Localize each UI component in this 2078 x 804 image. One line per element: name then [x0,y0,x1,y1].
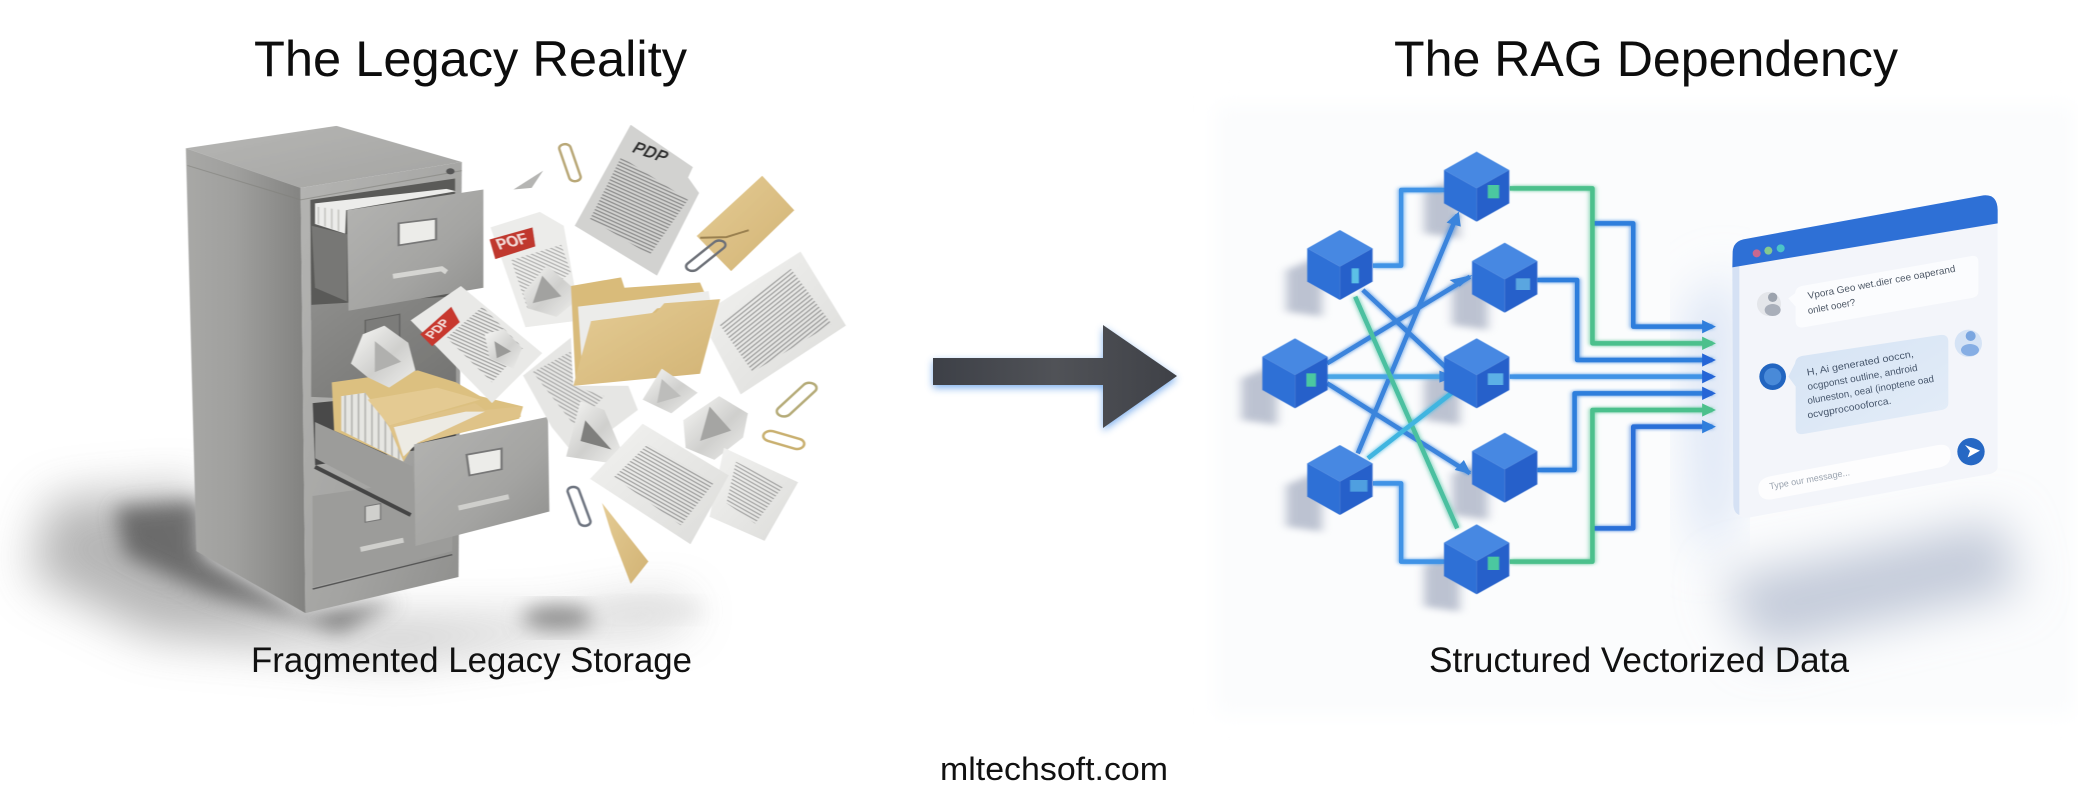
illustration: exploding filing cabinet [30,125,846,655]
caption: Structured Vectorized Data: Structured Vectorized Data [1429,641,1850,680]
envelope [697,176,794,271]
paper scrap [514,171,543,190]
window frame [1733,195,1998,518]
message input [1758,445,1951,499]
flying documents [351,125,846,584]
crumpled paper balls [351,326,748,463]
user message: onlet ooer? [1807,297,1857,317]
document behind folder [523,338,638,456]
PDF document with red tag: PDP [422,317,453,341]
lower documents [590,424,798,544]
right panel background [1215,105,2075,715]
right document [711,252,846,394]
footer: mltechsoft.com: mltechsoft.com [940,751,1168,787]
assistant message: ocgponst outline, android [1807,363,1918,393]
data cubes [1262,152,1537,594]
document with PDF heading: PDP [628,138,673,166]
top open drawer [312,189,483,311]
arrow [933,325,1177,431]
open manila folder [571,277,720,386]
document with PDF heading [575,125,699,276]
cabinet body [186,126,462,613]
user message: Vpora Geo wet.dier cee oaperand [1807,264,1956,302]
assistant message: oluneston, oeal (inoptene oad [1807,374,1935,407]
PDF document [490,212,580,327]
illustration: vector network to chat window [1241,152,2020,650]
window title bar [1732,195,1998,267]
user message [1757,256,1978,327]
assistant message [1759,330,1982,434]
caption: Fragmented Legacy Storage: Fragmented Legacy Storage [251,641,692,680]
paperclips [558,143,819,527]
assistant message: ocvgprocoooforca. [1807,396,1892,421]
folded manila scrap [602,503,648,584]
assistant message: H, Ai generated ooccn, [1806,349,1915,379]
cube shadows [1241,177,1488,612]
window buttons [1753,244,1785,257]
PDF document with red tag [411,286,542,403]
window shadow [1690,270,2020,650]
diagonal arrowheads [1439,212,1473,474]
crumpled paper [523,265,573,317]
floor shadow [30,488,705,655]
window left edge [1732,266,1739,515]
arrowheads into chat window [1702,320,1716,433]
connection lines [1327,188,1712,562]
title: The RAG Dependency: The RAG Dependency [1394,31,1898,87]
PDF document: POF [494,231,531,254]
chat window [1732,195,1998,518]
title: The Legacy Reality: The Legacy Reality [254,31,687,87]
lower open drawer with folders [315,370,549,549]
send button [1957,438,1985,465]
message input: Type our message... [1769,467,1851,491]
